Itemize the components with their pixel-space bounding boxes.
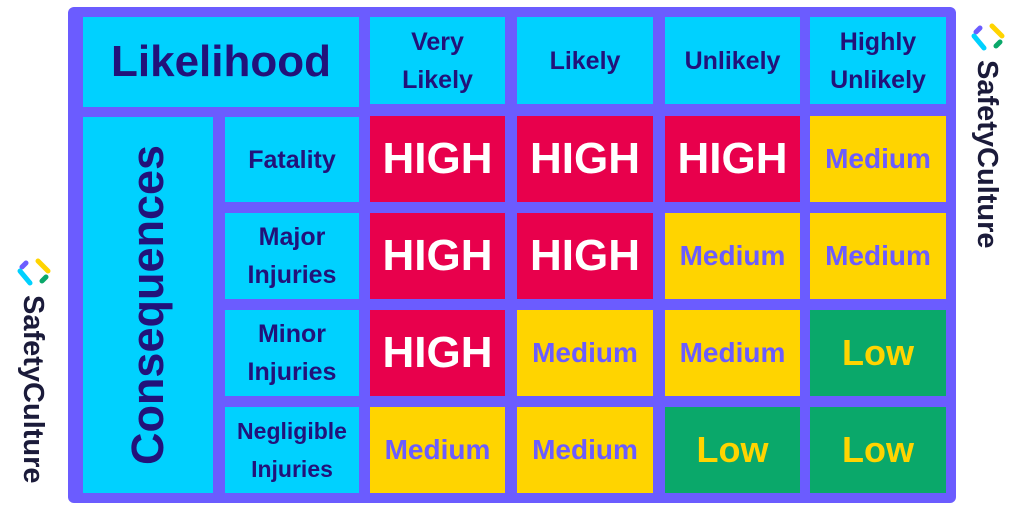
row label: Negligible Injuries: Negligible [237,418,347,444]
row label: Major Injuries: Major [259,223,325,251]
row label: Major Injuries: Injuries [248,261,336,289]
header: Unlikely: Unlikely [685,46,780,74]
matrix row 4 [370,407,946,493]
row label: Fatality: Fatality [248,146,336,174]
text: HIGH [530,231,640,280]
logo: SafetyCulture left: SafetyCulture [17,295,49,484]
header: Very Likely: Very [411,28,464,56]
text: Low [842,429,914,470]
row label: Minor Injuries [225,310,359,396]
text: Low [842,332,914,373]
row label: Major Injuries [225,213,359,299]
header: Highly Unlikely: Highly [840,28,916,56]
matrix row 2 [370,213,946,299]
text: HIGH [382,328,492,377]
text: Medium [825,143,931,174]
row label: Fatality [225,117,359,202]
matrix row 3 [370,310,946,396]
header: Likely: Likely [550,46,620,74]
text: Medium [825,240,931,271]
text: Medium [680,337,785,368]
header: Very Likely [370,17,505,104]
text: Medium [532,337,638,368]
text: Medium [680,240,785,271]
row label: Minor Injuries: Minor [258,320,326,348]
text: HIGH [382,231,492,280]
heading: Consequences [83,117,213,493]
header: Highly Unlikely [810,17,946,104]
header: Highly Unlikely: Unlikely [830,66,926,94]
header: Unlikely [665,17,800,104]
header: Very Likely: Likely [402,66,473,94]
text: HIGH [530,134,640,183]
matrix row 1 [370,116,946,202]
text: Low [696,429,768,470]
header: Likely [517,17,653,104]
text: HIGH [678,134,788,183]
text: Medium [532,434,638,465]
row label: Negligible Injuries [225,407,359,493]
row label: Negligible Injuries: Injuries [251,456,333,482]
heading: Likelihood: Likelihood [111,37,331,86]
logo: SafetyCulture right: SafetyCulture [971,60,1003,249]
heading: Consequences: Consequences [122,145,173,465]
text: HIGH [382,134,492,183]
text: Medium [385,434,490,465]
row label: Minor Injuries: Injuries [248,358,336,386]
heading: Likelihood [83,17,359,107]
